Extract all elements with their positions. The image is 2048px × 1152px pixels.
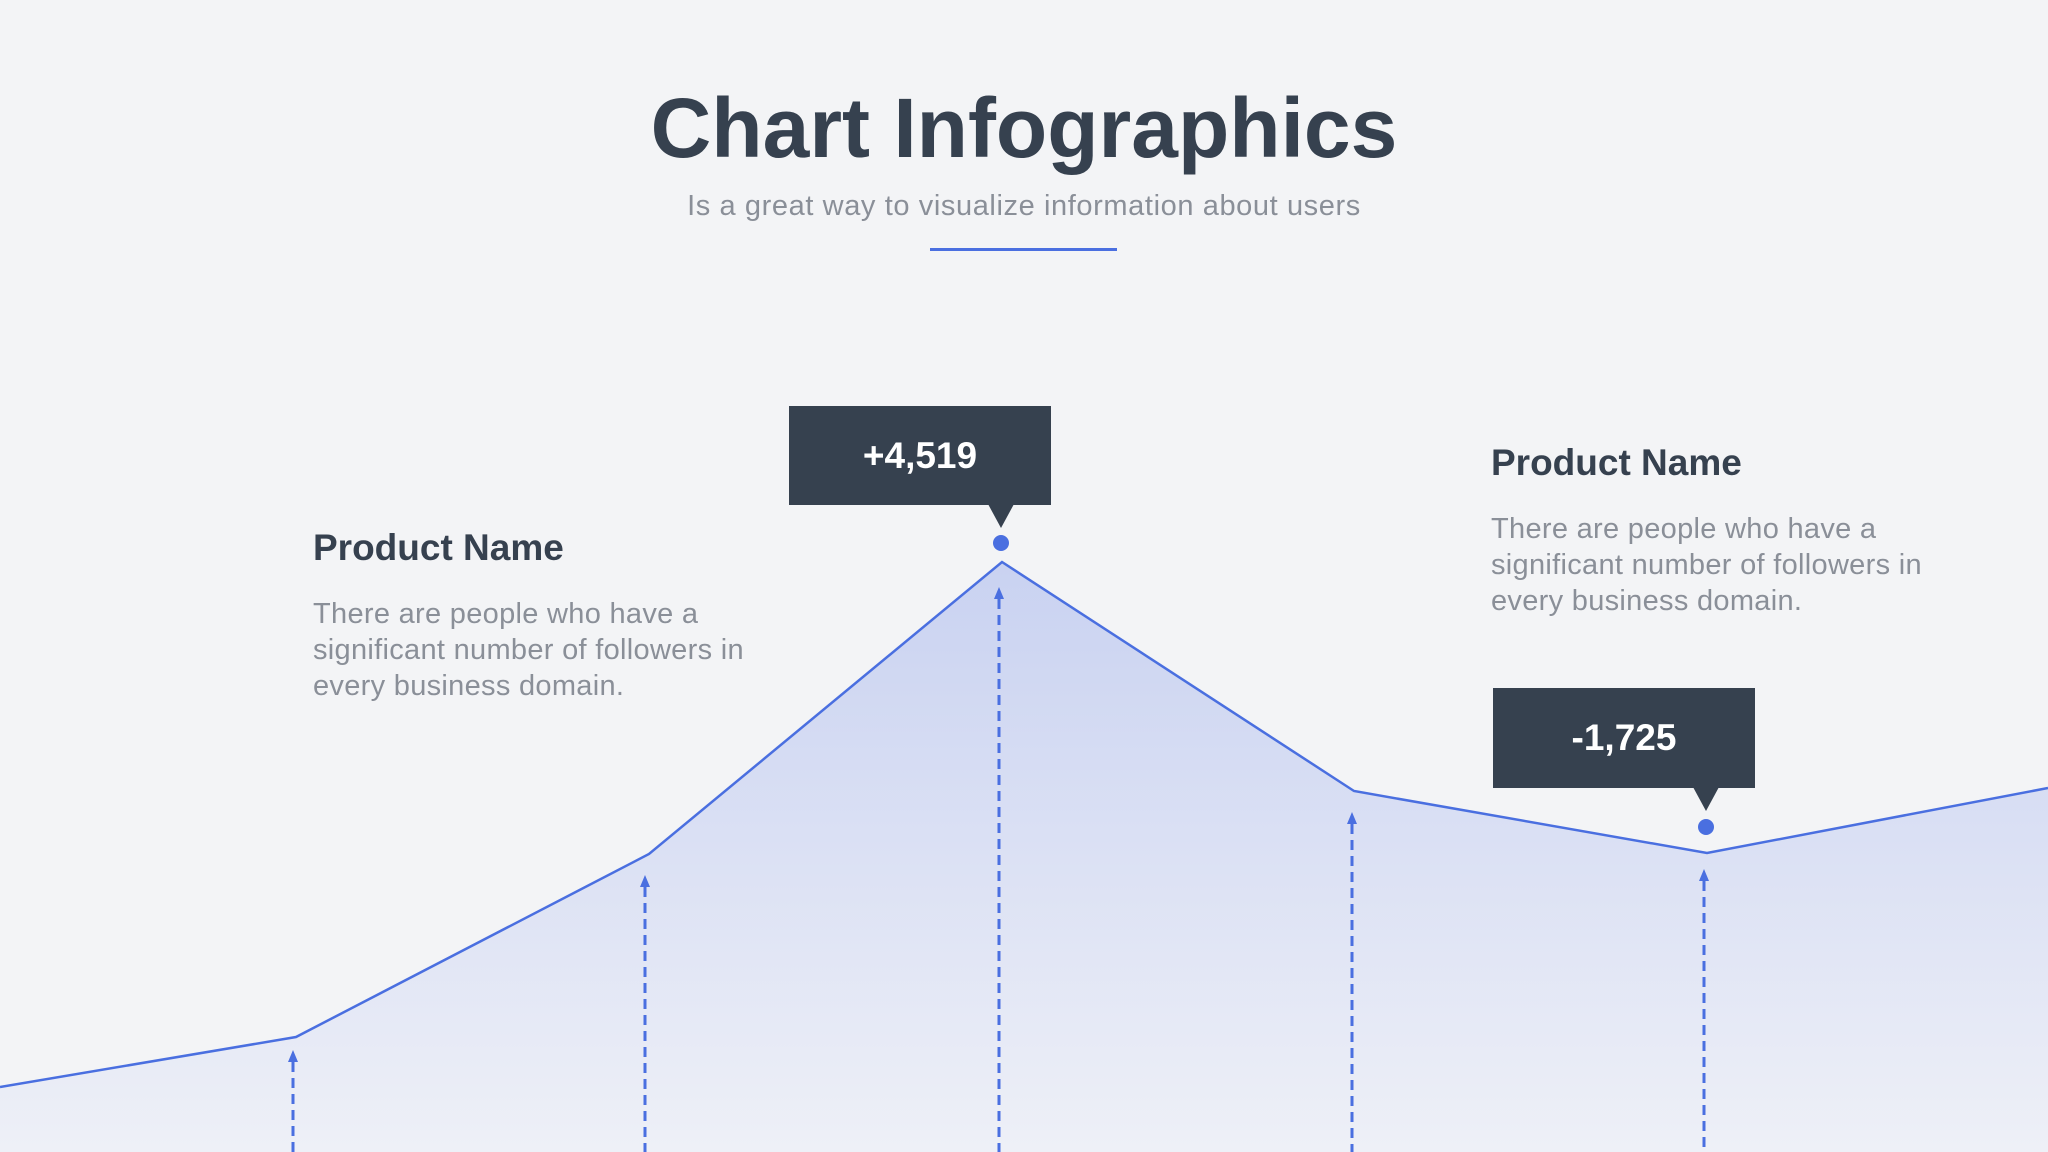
callout: -1,725: -1,725 xyxy=(1572,717,1676,758)
callout: -1,725 xyxy=(1493,688,1755,811)
text block left: Product Name xyxy=(313,527,564,568)
dots xyxy=(993,535,1009,551)
callout: +4,519 xyxy=(789,406,1051,528)
dashed arrows xyxy=(293,599,1704,1152)
callout: +4,519: +4,519 xyxy=(863,435,977,476)
line xyxy=(0,562,2048,1087)
title: Chart Infographics xyxy=(651,81,1397,175)
area fill xyxy=(0,562,2048,1152)
subtitle: Is a great way to visualize information about users xyxy=(687,190,1361,222)
text block right xyxy=(1491,442,1922,617)
text block left xyxy=(313,527,744,702)
text block right: There are people who have a significant number of followers in every business domain. xyxy=(1491,513,1922,617)
text block right: Product Name xyxy=(1491,442,1742,483)
text block left: There are people who have a significant number of followers in every business domain. xyxy=(313,598,744,702)
